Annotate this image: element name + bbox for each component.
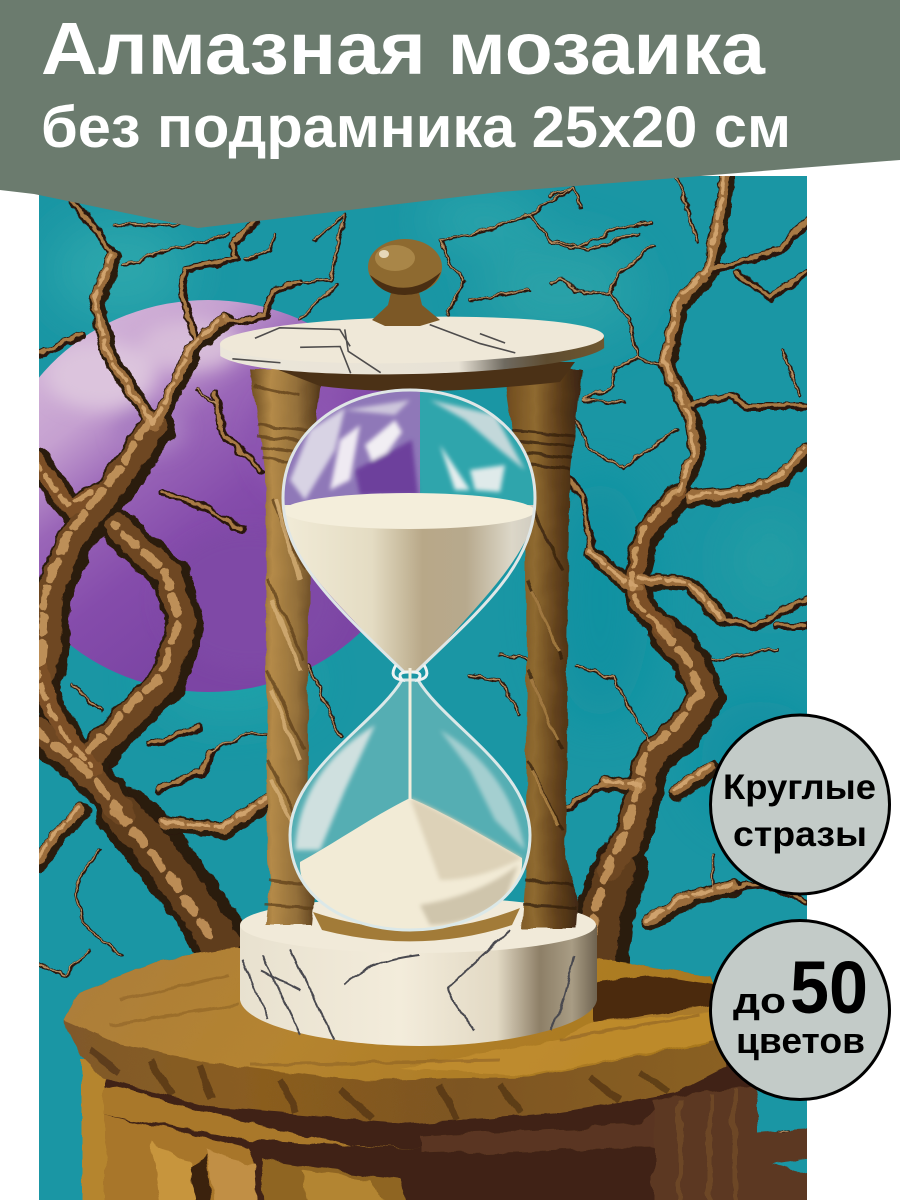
top marble plate xyxy=(220,316,604,374)
table top xyxy=(63,948,727,1124)
subtitle: без подрамника 25х20 см xyxy=(41,95,791,160)
right post xyxy=(503,370,582,928)
neck loops xyxy=(393,665,427,680)
painting: hourglass with tree and moon xyxy=(0,173,820,1200)
tree branches xyxy=(31,173,807,1140)
badge: up to 50 colours xyxy=(710,920,890,1100)
lower bulb outline xyxy=(290,680,530,930)
badge word: up to: до xyxy=(733,980,786,1021)
marble cracks xyxy=(243,930,575,1040)
upper sand cone xyxy=(283,505,537,672)
badge word: colours: цветов xyxy=(736,1020,865,1061)
lower sand xyxy=(300,798,522,932)
title: Алмазная мозаика xyxy=(41,7,766,90)
brass ring xyxy=(313,908,520,941)
left post xyxy=(250,370,322,925)
top plate underside xyxy=(258,362,575,391)
upper bulb xyxy=(280,385,540,672)
sand surface xyxy=(283,493,535,529)
falling sand stream xyxy=(408,668,412,800)
badge: round rhinestones xyxy=(710,715,890,894)
badge number 50: 50 xyxy=(790,946,868,1029)
badge text line 1: Круглые xyxy=(723,768,876,807)
glass hourglass xyxy=(280,385,540,935)
lower bulb xyxy=(285,680,535,935)
knob xyxy=(368,239,442,326)
moon xyxy=(39,300,384,692)
table shadow xyxy=(593,975,720,1022)
table body xyxy=(81,1060,810,1200)
plate cracks xyxy=(232,323,516,376)
badge text line 2: стразы xyxy=(733,815,867,854)
header banner xyxy=(0,0,900,228)
glass mount xyxy=(381,390,429,406)
upper bulb outline xyxy=(283,390,535,672)
sky background xyxy=(39,176,820,1200)
marble base xyxy=(240,897,597,1046)
